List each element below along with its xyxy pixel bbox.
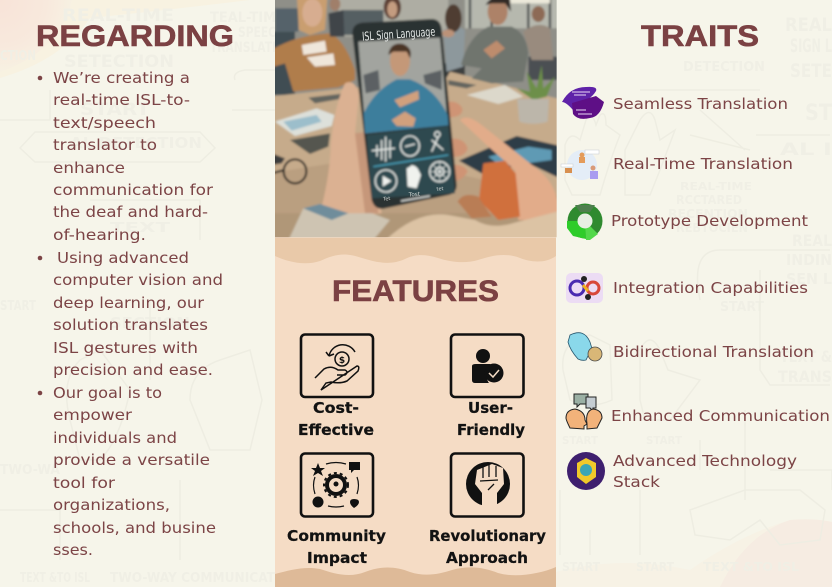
image: people signing with a phone app: Tost: [408, 192, 421, 199]
text block: regarding bullets: translator to: [53, 136, 157, 154]
icon: user with check: [472, 349, 504, 383]
phone frame: [352, 19, 457, 209]
watermark: left panel: AL DETECTION: [70, 134, 202, 152]
feature: cost-effective: Cost-: [313, 399, 359, 417]
feature: cost-effective: $: [339, 356, 345, 366]
feature: cost-effective: Effective: [298, 421, 374, 439]
woman in orange sweater: [268, 33, 355, 92]
text block: regarding bullets: precision and ease.: [53, 361, 213, 379]
text block: regarding bullets: computer vision and: [53, 271, 223, 289]
watermark: right panel: START: [636, 560, 675, 574]
trait: bidirectional translation: [568, 333, 814, 361]
watermark: left panel: SPEEC: [238, 25, 276, 41]
icon: infinity gears: [566, 273, 603, 303]
text block: regarding bullets: [38, 69, 223, 559]
trait: advanced technology stack: Advanced Technology: [613, 452, 797, 470]
watermark: right panel: AL I: [780, 140, 832, 160]
heading: traits: TRAITS: [641, 20, 759, 53]
trait: integration capabilities: [566, 273, 808, 303]
table items: [467, 85, 523, 104]
watermark: left panel: TEAL-TIM: [210, 10, 276, 26]
heading: features: FEATURES: [332, 275, 499, 308]
text block: regarding bullets: schools, and busine: [53, 519, 216, 537]
watermark: right panel: START: [646, 434, 682, 447]
text block: regarding bullets: Using advanced: [57, 249, 189, 267]
watermark: left panel: [0, 6, 276, 586]
text block: regarding bullets: deep learning, our: [53, 294, 205, 312]
woman in grey: [443, 27, 465, 72]
text block: regarding bullets: communication for: [53, 181, 214, 199]
text block: regarding bullets: individuals and: [53, 429, 177, 447]
feature: user-friendly: [451, 334, 525, 439]
plant: [517, 65, 555, 100]
trait: enhanced communication: Enhanced Communication: [611, 407, 830, 425]
trait: seamless translation: Seamless Translation: [613, 95, 788, 113]
watermark: right panel: RECENTION: [668, 207, 748, 221]
text block: regarding bullets: text/speech: [53, 114, 156, 132]
left sleeve: [288, 208, 390, 238]
text block: regarding bullets: Our goal is to: [53, 384, 162, 402]
watermark: right panel: START: [562, 434, 598, 447]
background woman: [384, 0, 401, 19]
conference table: [275, 70, 557, 196]
phone icon grid: [367, 126, 455, 198]
watermark: left panel: SECTION: [110, 314, 190, 332]
icon: gear with star, chat, smile and heart: [311, 462, 360, 508]
watermark: left panel: TWO-WAY COMMUNICAT: [110, 571, 275, 586]
text block: regarding bullets: enhance: [53, 159, 125, 177]
trait: advanced technology stack: Stack: [613, 473, 660, 491]
holding hand: [322, 82, 382, 217]
text block: regarding bullets: real-time ISL-to-: [53, 91, 190, 109]
panel: centre features background: [275, 237, 556, 587]
watermark: right panel: START: [562, 560, 601, 574]
feature: community impact: Impact: [307, 549, 367, 567]
fingertips behind phone: [448, 102, 468, 180]
pointing hand: [460, 118, 560, 220]
text block: regarding bullets: tool for: [53, 474, 116, 492]
trait: integration capabilities: Integration Capabilities: [613, 279, 808, 297]
trait: prototype development: Prototype Development: [611, 212, 808, 230]
upper wave band: [275, 238, 556, 263]
text block: regarding bullets: provide a versatile: [53, 451, 210, 469]
watermark: left panel: START: [0, 299, 36, 314]
icon: purple circle with badge: [567, 452, 605, 490]
phone heading: ISL Sign Language: [362, 25, 436, 44]
phone screen photo: [356, 36, 448, 114]
trait: real-time translation: Real-Time Translation: [613, 155, 793, 173]
trait: real-time translation: [561, 150, 793, 180]
office backdrop: [275, 0, 557, 100]
text block: regarding bullets: We’re creating a: [53, 69, 190, 87]
man in grey sweater: [461, 27, 528, 83]
trait: enhanced communication: [566, 394, 830, 429]
text block: regarding bullets: empower: [53, 406, 133, 424]
watermark: right panel: [560, 14, 832, 574]
feature: cost-effective: [298, 334, 374, 439]
icon: head and translate badge: [568, 333, 602, 361]
watermark: left panel: CTION: [0, 49, 36, 64]
icon: raised fist: [466, 462, 510, 506]
watermark: left panel: START: [80, 100, 150, 120]
text block: regarding bullets: organizations,: [53, 496, 170, 514]
trait: seamless translation: [562, 87, 788, 119]
image: people signing with a phone app: Tet: [382, 196, 391, 203]
watermark: right panel: DETECTION: [683, 60, 765, 75]
watermark: right panel: RCCTARED: [676, 193, 742, 207]
watermark: left panel: TWO-WA: [0, 463, 60, 478]
image: people signing with a phone app: tet: [436, 186, 444, 193]
text block: regarding bullets: ISL gestures with: [53, 339, 198, 357]
icon: hand with coin: [315, 345, 359, 390]
text block: regarding bullets: solution translates: [53, 316, 208, 334]
watermark: right panel: START: [720, 300, 764, 315]
watermark: right panel: REAL-TIME: [680, 180, 752, 193]
feature: revolutionary approach: [429, 454, 546, 567]
feature: revolutionary approach: Revolutionary: [429, 527, 546, 545]
icon: people around globe: [561, 150, 599, 180]
image: people signing with a phone app: [268, 0, 563, 244]
watermark: left panel: SETECTION: [64, 52, 174, 72]
text block: regarding bullets: of-hearing.: [53, 226, 146, 244]
watermark: left panel: TRANSLATI: [210, 40, 276, 56]
feature: user-friendly: User-: [468, 399, 513, 417]
watermark: right panel: REBTOCIEN: [676, 221, 748, 235]
glasses: [284, 159, 306, 183]
watermark: left panel: REAL-TIME: [62, 6, 174, 26]
watermark: left panel: TEXT: [110, 221, 170, 236]
lower wave band: [275, 567, 556, 587]
text block: regarding bullets: sses.: [53, 541, 93, 559]
feature: community impact: Community: [287, 527, 386, 545]
icon: purple swirl: [562, 87, 604, 119]
text block: regarding bullets: the deaf and hard-: [53, 203, 208, 221]
watermark: right panel: TEXT &TO ISL: [703, 560, 799, 574]
trait: bidirectional translation: Bidirectional Translation: [613, 343, 814, 361]
icon: green segmented wheel: [567, 204, 602, 240]
feature: community impact: [287, 454, 386, 567]
feature: revolutionary approach: Approach: [446, 549, 528, 567]
trait: prototype development: [567, 204, 808, 240]
icon: two heads talking: [566, 394, 602, 429]
trait: advanced technology stack: [567, 452, 797, 491]
heading: regarding: REGARDING: [36, 20, 234, 53]
right sleeve: [388, 211, 557, 238]
feature: user-friendly: Friendly: [457, 421, 525, 439]
watermark: left panel: TEXT &TO ISL: [20, 571, 90, 586]
